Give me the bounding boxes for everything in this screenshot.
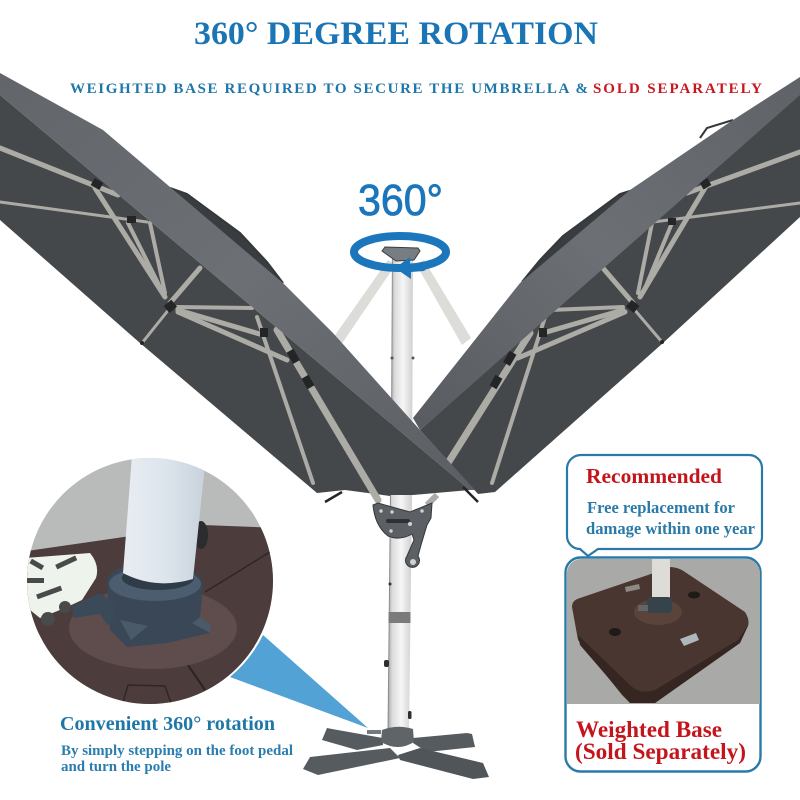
blue callout wedge (230, 635, 368, 728)
cross base stand (303, 727, 489, 779)
replacement text (586, 498, 755, 538)
left canopy joints (91, 178, 314, 389)
foot pedal (72, 593, 110, 625)
pedal description: and turn the pole (61, 759, 172, 775)
recommended heading: Recommended (586, 464, 722, 488)
weighted base panel (565, 557, 762, 772)
rotation ring icon (354, 236, 446, 279)
back legs (322, 728, 383, 750)
base housing (107, 566, 211, 647)
inset pole (123, 455, 206, 583)
replacement text: Free replacement for (587, 498, 735, 517)
convenient rotation heading: Convenient 360° rotation (60, 713, 275, 735)
subtitle notice: SOLD SEPARATELY (593, 81, 762, 97)
left canopy (0, 73, 478, 502)
recommended speech bubble (567, 455, 762, 556)
title: 360° DEGREE ROTATION (194, 16, 598, 52)
brown base blocks (20, 525, 280, 710)
left canopy underside (0, 95, 470, 496)
front legs (303, 748, 400, 775)
left canopy ribs (0, 148, 378, 500)
base hub (381, 727, 414, 747)
right canopy top panel (413, 77, 800, 430)
knob (196, 521, 208, 549)
360 degree label: 360° (358, 176, 443, 225)
weighted base caption: Weighted Base (576, 717, 722, 742)
subtitle notice: WEIGHTED BASE REQUIRED TO SECURE THE UMBRELLA & (70, 81, 588, 97)
right canopy joints (490, 178, 711, 389)
pedal description: By simply stepping on the foot pedal (61, 743, 293, 759)
right canopy underside (420, 93, 800, 494)
pedal description (61, 743, 293, 775)
replacement text: damage within one year (586, 519, 755, 538)
photo of weighted base (565, 557, 762, 705)
right canopy ribs (448, 152, 800, 483)
shoe (26, 553, 97, 618)
foot pedal (367, 730, 381, 734)
inset circle: foot pedal detail (20, 455, 280, 710)
left canopy straps (72, 120, 283, 283)
right canopy (413, 77, 800, 494)
weighted base caption: (Sold Separately) (575, 739, 746, 764)
right canopy straps (522, 120, 733, 282)
umbrella top hub and support struts (333, 250, 471, 500)
tilt crank housing (373, 495, 437, 567)
canopy corner clips (325, 487, 478, 502)
left canopy top panel (0, 73, 475, 490)
weighted base caption (575, 717, 746, 764)
lower pole (384, 495, 412, 732)
